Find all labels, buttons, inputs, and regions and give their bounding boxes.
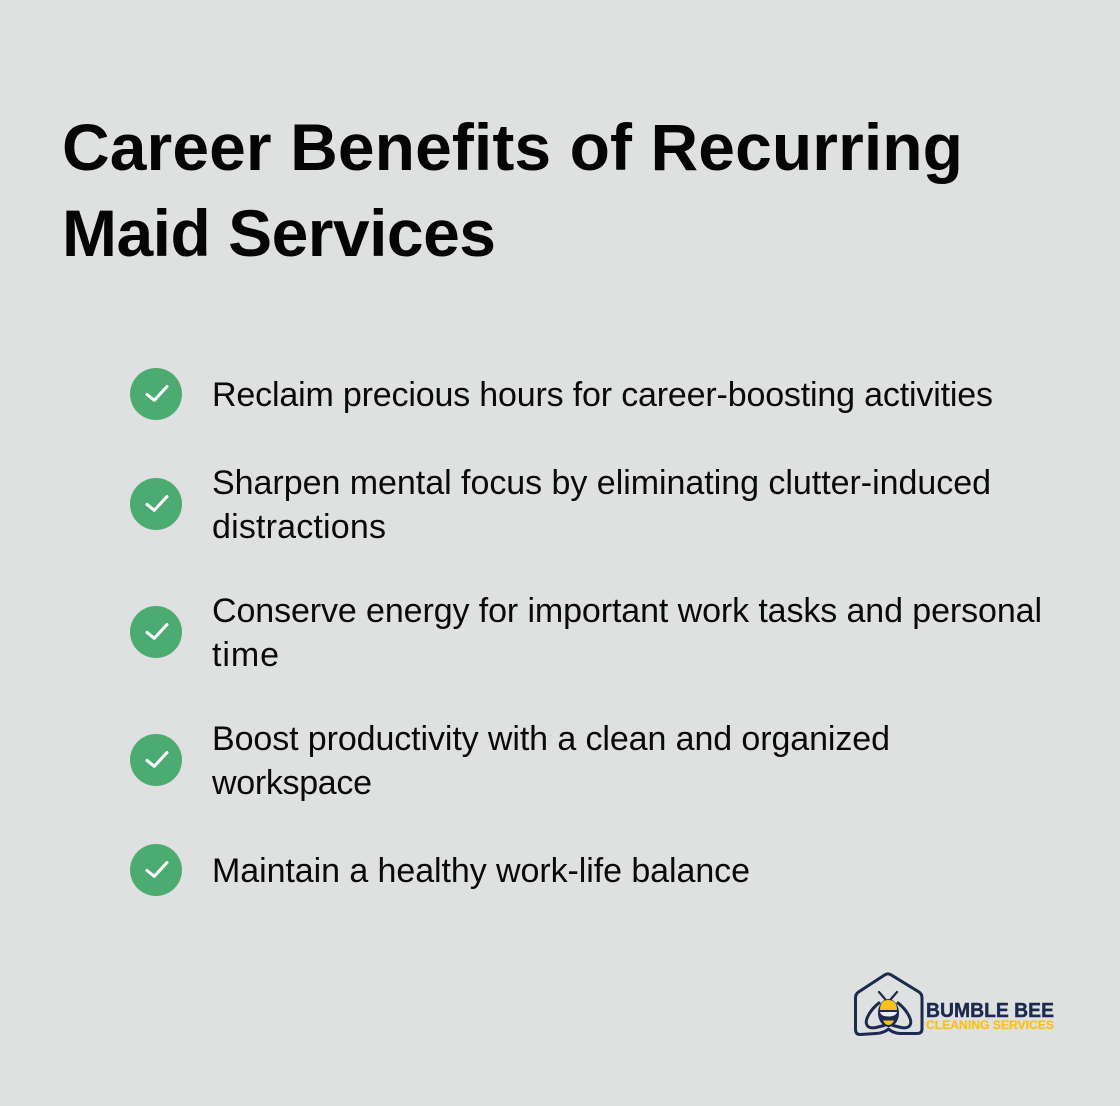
title: Maid Services	[62, 196, 496, 270]
benefit 5: Maintain a healthy work-life balance	[212, 852, 750, 890]
icon: house with bee	[856, 974, 922, 1034]
brand tagline: CLEANING SERVICES	[926, 1020, 1054, 1032]
logo: Bumble Bee Cleaning Services	[856, 974, 1054, 1034]
brand name: BUMBLE BEE	[926, 999, 1054, 1022]
benefit 2: Sharpen mental focus by eliminating clutter-induced	[212, 464, 991, 502]
title: Career Benefits of Recurring	[62, 110, 963, 184]
benefit 1	[130, 368, 993, 420]
title	[62, 110, 963, 270]
benefits list	[130, 368, 1042, 896]
benefit 4: workspace	[211, 764, 372, 802]
benefit 2: distractions	[212, 508, 386, 546]
benefit 4: Boost productivity with a clean and organized	[212, 720, 890, 758]
benefit 4	[130, 720, 890, 802]
benefit 3	[130, 592, 1042, 674]
benefit 5	[130, 844, 750, 896]
benefit 2	[130, 464, 991, 546]
benefit 3: Conserve energy for important work tasks and personal	[212, 592, 1042, 630]
benefit 3: time	[212, 636, 279, 674]
benefit 1: Reclaim precious hours for career-boosting activities	[212, 376, 993, 414]
